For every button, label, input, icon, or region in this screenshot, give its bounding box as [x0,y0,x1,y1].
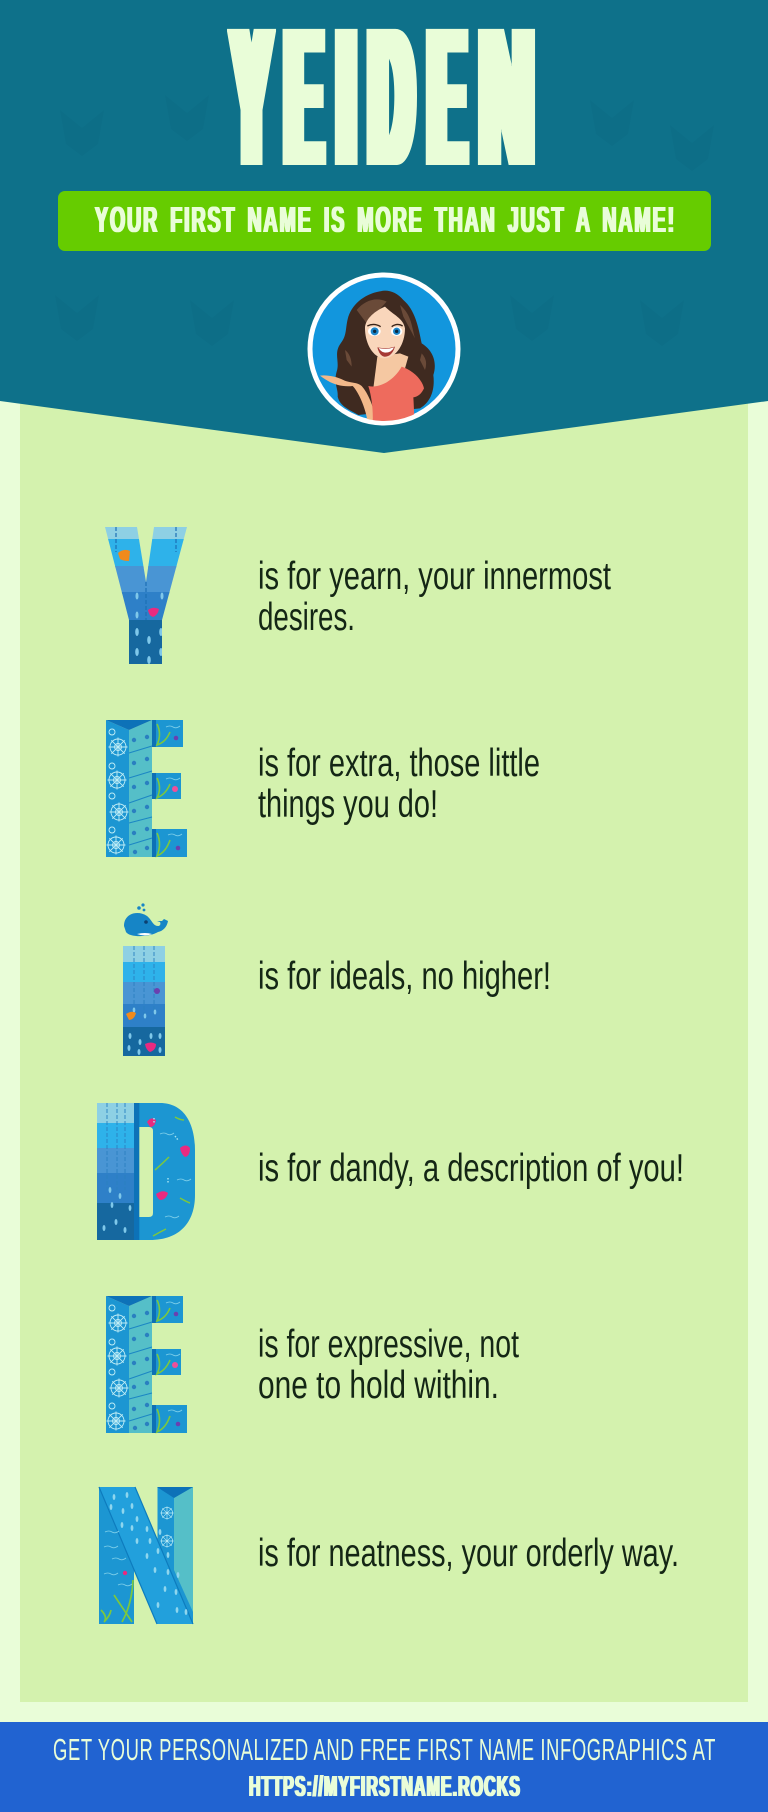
letter D [97,1103,195,1240]
letter Y [100,527,190,664]
text: Y line [258,555,611,639]
text: second E line: is for expressive, not [258,1323,519,1366]
banner [58,191,711,251]
text: Y line: is for yearn, your innermost [258,555,611,598]
text: second E line: one to hold within. [258,1364,499,1407]
avatar: woman with long brown hair [310,275,458,423]
icon: orange fish [118,550,130,561]
text: E line [258,742,540,826]
text: E line: things you do! [258,783,438,826]
header band [0,0,768,453]
icon: pink fish [148,608,159,617]
letter N [99,1487,193,1624]
text: second E line [258,1323,519,1407]
text: E line: is for extra, those little [258,742,540,785]
text: I line: is for ideals, no higher! [258,955,551,998]
letter E (first) [106,720,187,857]
icon: whale [124,903,168,936]
content panel [20,395,748,1702]
letter I with whale dot [123,903,168,1056]
letter E (second) [106,1296,187,1433]
footer: HTTPS://MYFIRSTNAME.ROCKS [249,1771,521,1803]
text: Y line: desires. [258,596,355,639]
footer [0,1722,768,1812]
